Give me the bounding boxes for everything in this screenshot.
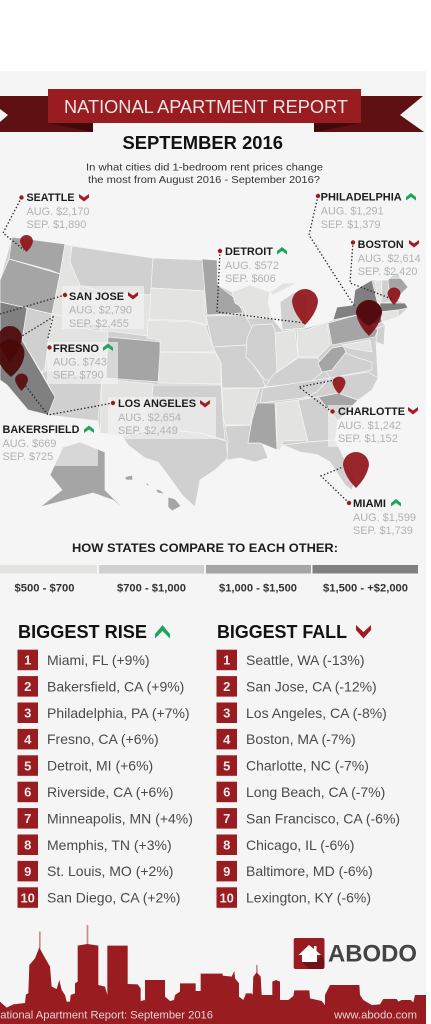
- rise list: 5: [24, 758, 31, 773]
- label: Detroit: [218, 246, 287, 285]
- subtitle question: In what cities did 1-bedroom rent prices change: [86, 162, 323, 174]
- fall list: Boston, MA (-7%): [246, 731, 356, 747]
- fall list: 1: [223, 653, 230, 668]
- fall list: 4: [223, 732, 231, 747]
- rise list: Riverside, CA (+6%): [47, 784, 173, 800]
- label: Miami: [347, 498, 416, 537]
- subtitle question: the most from August 2016 - September 2016?: [88, 175, 320, 186]
- logo: Abodo: [294, 938, 417, 969]
- logo: Abodo: ABODO: [328, 940, 417, 968]
- title banner: [0, 89, 424, 132]
- label: Philadelphia: SEP. $1,379: [321, 219, 380, 231]
- rise list: Bakersfield, CA (+9%): [47, 678, 184, 694]
- rise list: Philadelphia, PA (+7%): [47, 705, 190, 721]
- rise list: 2: [24, 679, 31, 694]
- fall list: 8: [223, 838, 230, 852]
- fall list: San Francisco, CA (-6%): [246, 810, 400, 826]
- rise list: Minneapolis, MN (+4%): [47, 810, 193, 826]
- icon: green up chevron: [155, 625, 170, 638]
- rise list: 3: [24, 706, 31, 720]
- label: Seattle: SEP. $1,890: [26, 219, 86, 231]
- fall list: 3: [223, 706, 230, 720]
- footer text: [0, 1010, 417, 1022]
- footer city skyline: [0, 925, 426, 1024]
- label: Seattle: AUG. $2,170: [26, 206, 89, 218]
- label: San Jose: SAN JOSE: [69, 291, 124, 303]
- legend colour scale: $1,500 - +$2,000: [323, 582, 408, 594]
- heading: biggest fall: BIGGEST FALL: [217, 622, 347, 642]
- fall list: 2: [223, 679, 230, 694]
- footer text: www.abodo.com: [333, 1010, 417, 1022]
- label: Philadelphia: [316, 192, 416, 231]
- fall list: Lexington, KY (-6%): [246, 890, 371, 906]
- label: Fresno: FRESNO: [53, 343, 99, 355]
- icon: red down chevron: [356, 625, 371, 638]
- fall list: Chicago, IL (-6%): [246, 837, 354, 853]
- label: Bakersfield: AUG. $669: [2, 438, 56, 450]
- label: San Jose: [63, 291, 138, 330]
- label: Detroit: SEP. $606: [225, 273, 276, 285]
- label: Bakersfield: SEP. $725: [2, 451, 53, 463]
- rise list: 8: [24, 838, 31, 852]
- label: Los Angeles: LOS ANGELES: [118, 398, 196, 410]
- label: Fresno: AUG. $743: [53, 356, 107, 368]
- subtitle question: [86, 162, 323, 186]
- label: Fresno: SEP. $790: [53, 370, 104, 382]
- fall list: Long Beach, CA (-7%): [246, 784, 385, 800]
- label: San Jose: SEP. $2,455: [69, 318, 129, 330]
- label: Bakersfield: BAKERSFIELD: [2, 424, 80, 436]
- label: Los Angeles: SEP. $2,449: [118, 425, 178, 437]
- heading: September 2016: SEPTEMBER 2016: [122, 132, 283, 153]
- label: Los Angeles: AUG. $2,654: [118, 412, 181, 424]
- label: Detroit: AUG. $572: [225, 260, 279, 272]
- label: Miami: AUG. $1,599: [353, 512, 416, 524]
- rise list: Fresno, CA (+6%): [47, 731, 159, 747]
- fall list: Seattle, WA (-13%): [246, 652, 365, 668]
- US map of states: [0, 237, 408, 513]
- legend colour scale: $700 - $1,000: [117, 582, 186, 594]
- fall list: 9: [223, 864, 230, 879]
- label: Boston: AUG. $2,614: [358, 253, 421, 265]
- rise list: Memphis, TN (+3%): [47, 837, 172, 853]
- number squares: [216, 650, 237, 908]
- label: Miami: SEP. $1,739: [353, 525, 413, 537]
- legend colour scale: [0, 565, 418, 594]
- label: San Jose: AUG. $2,790: [69, 304, 132, 316]
- label: Fresno: [47, 343, 113, 382]
- map pins: [0, 235, 401, 488]
- label: Charlotte: SEP. $1,152: [338, 433, 398, 445]
- label: Los Angeles: [111, 398, 210, 437]
- panel: biggest fall: [216, 622, 400, 908]
- label: Charlotte: CHARLOTTE: [338, 406, 405, 418]
- fall list: Charlotte, NC (-7%): [246, 758, 369, 774]
- legend heading: HOW STATES COMPARE TO EACH OTHER:: [72, 541, 338, 555]
- rise list: 7: [24, 811, 31, 826]
- rise list: St. Louis, MO (+2%): [47, 863, 173, 879]
- number squares: [18, 650, 38, 908]
- rise list: 10: [20, 890, 35, 905]
- label: Charlotte: [330, 406, 418, 445]
- fall list: 7: [223, 811, 230, 826]
- label: Boston: [351, 239, 421, 278]
- rise list: 9: [24, 864, 31, 879]
- fall list: Los Angeles, CA (-8%): [246, 705, 387, 721]
- translucent label backgrounds: [0, 237, 417, 466]
- fall list: 6: [223, 785, 230, 800]
- legend colour scale: $500 - $700: [14, 582, 75, 594]
- heading: biggest rise: BIGGEST RISE: [18, 622, 147, 642]
- rise list: [20, 652, 193, 906]
- label: Philadelphia: AUG. $1,291: [321, 206, 384, 218]
- fall list: [219, 652, 400, 906]
- dotted leader lines: [0, 196, 392, 503]
- rise list: 1: [24, 653, 31, 668]
- rise list: San Diego, CA (+2%): [47, 890, 180, 906]
- label: Seattle: [19, 192, 89, 231]
- rise list: Detroit, MI (+6%): [47, 758, 153, 774]
- label: Bakersfield: [2, 424, 94, 463]
- title banner: NATIONAL APARTMENT REPORT: [64, 97, 348, 117]
- label: Boston: SEP. $2,420: [358, 266, 417, 278]
- rise list: Miami, FL (+9%): [47, 652, 150, 668]
- label: Philadelphia: PHILADELPHIA: [321, 192, 402, 204]
- fall list: 5: [223, 758, 230, 773]
- label: Detroit: DETROIT: [225, 246, 274, 258]
- label: Boston: BOSTON: [358, 239, 404, 251]
- fall list: Baltimore, MD (-6%): [246, 863, 373, 879]
- label: Seattle: SEATTLE: [26, 192, 74, 204]
- fall list: San Jose, CA (-12%): [246, 678, 377, 694]
- legend colour scale: $1,000 - $1,500: [219, 582, 297, 594]
- fall list: 10: [219, 890, 234, 905]
- rise list: 4: [24, 732, 32, 747]
- label: Charlotte: AUG. $1,242: [338, 420, 401, 432]
- rise list: 6: [24, 785, 31, 800]
- label: Miami: MIAMI: [353, 498, 386, 510]
- panel: biggest rise: [18, 622, 193, 908]
